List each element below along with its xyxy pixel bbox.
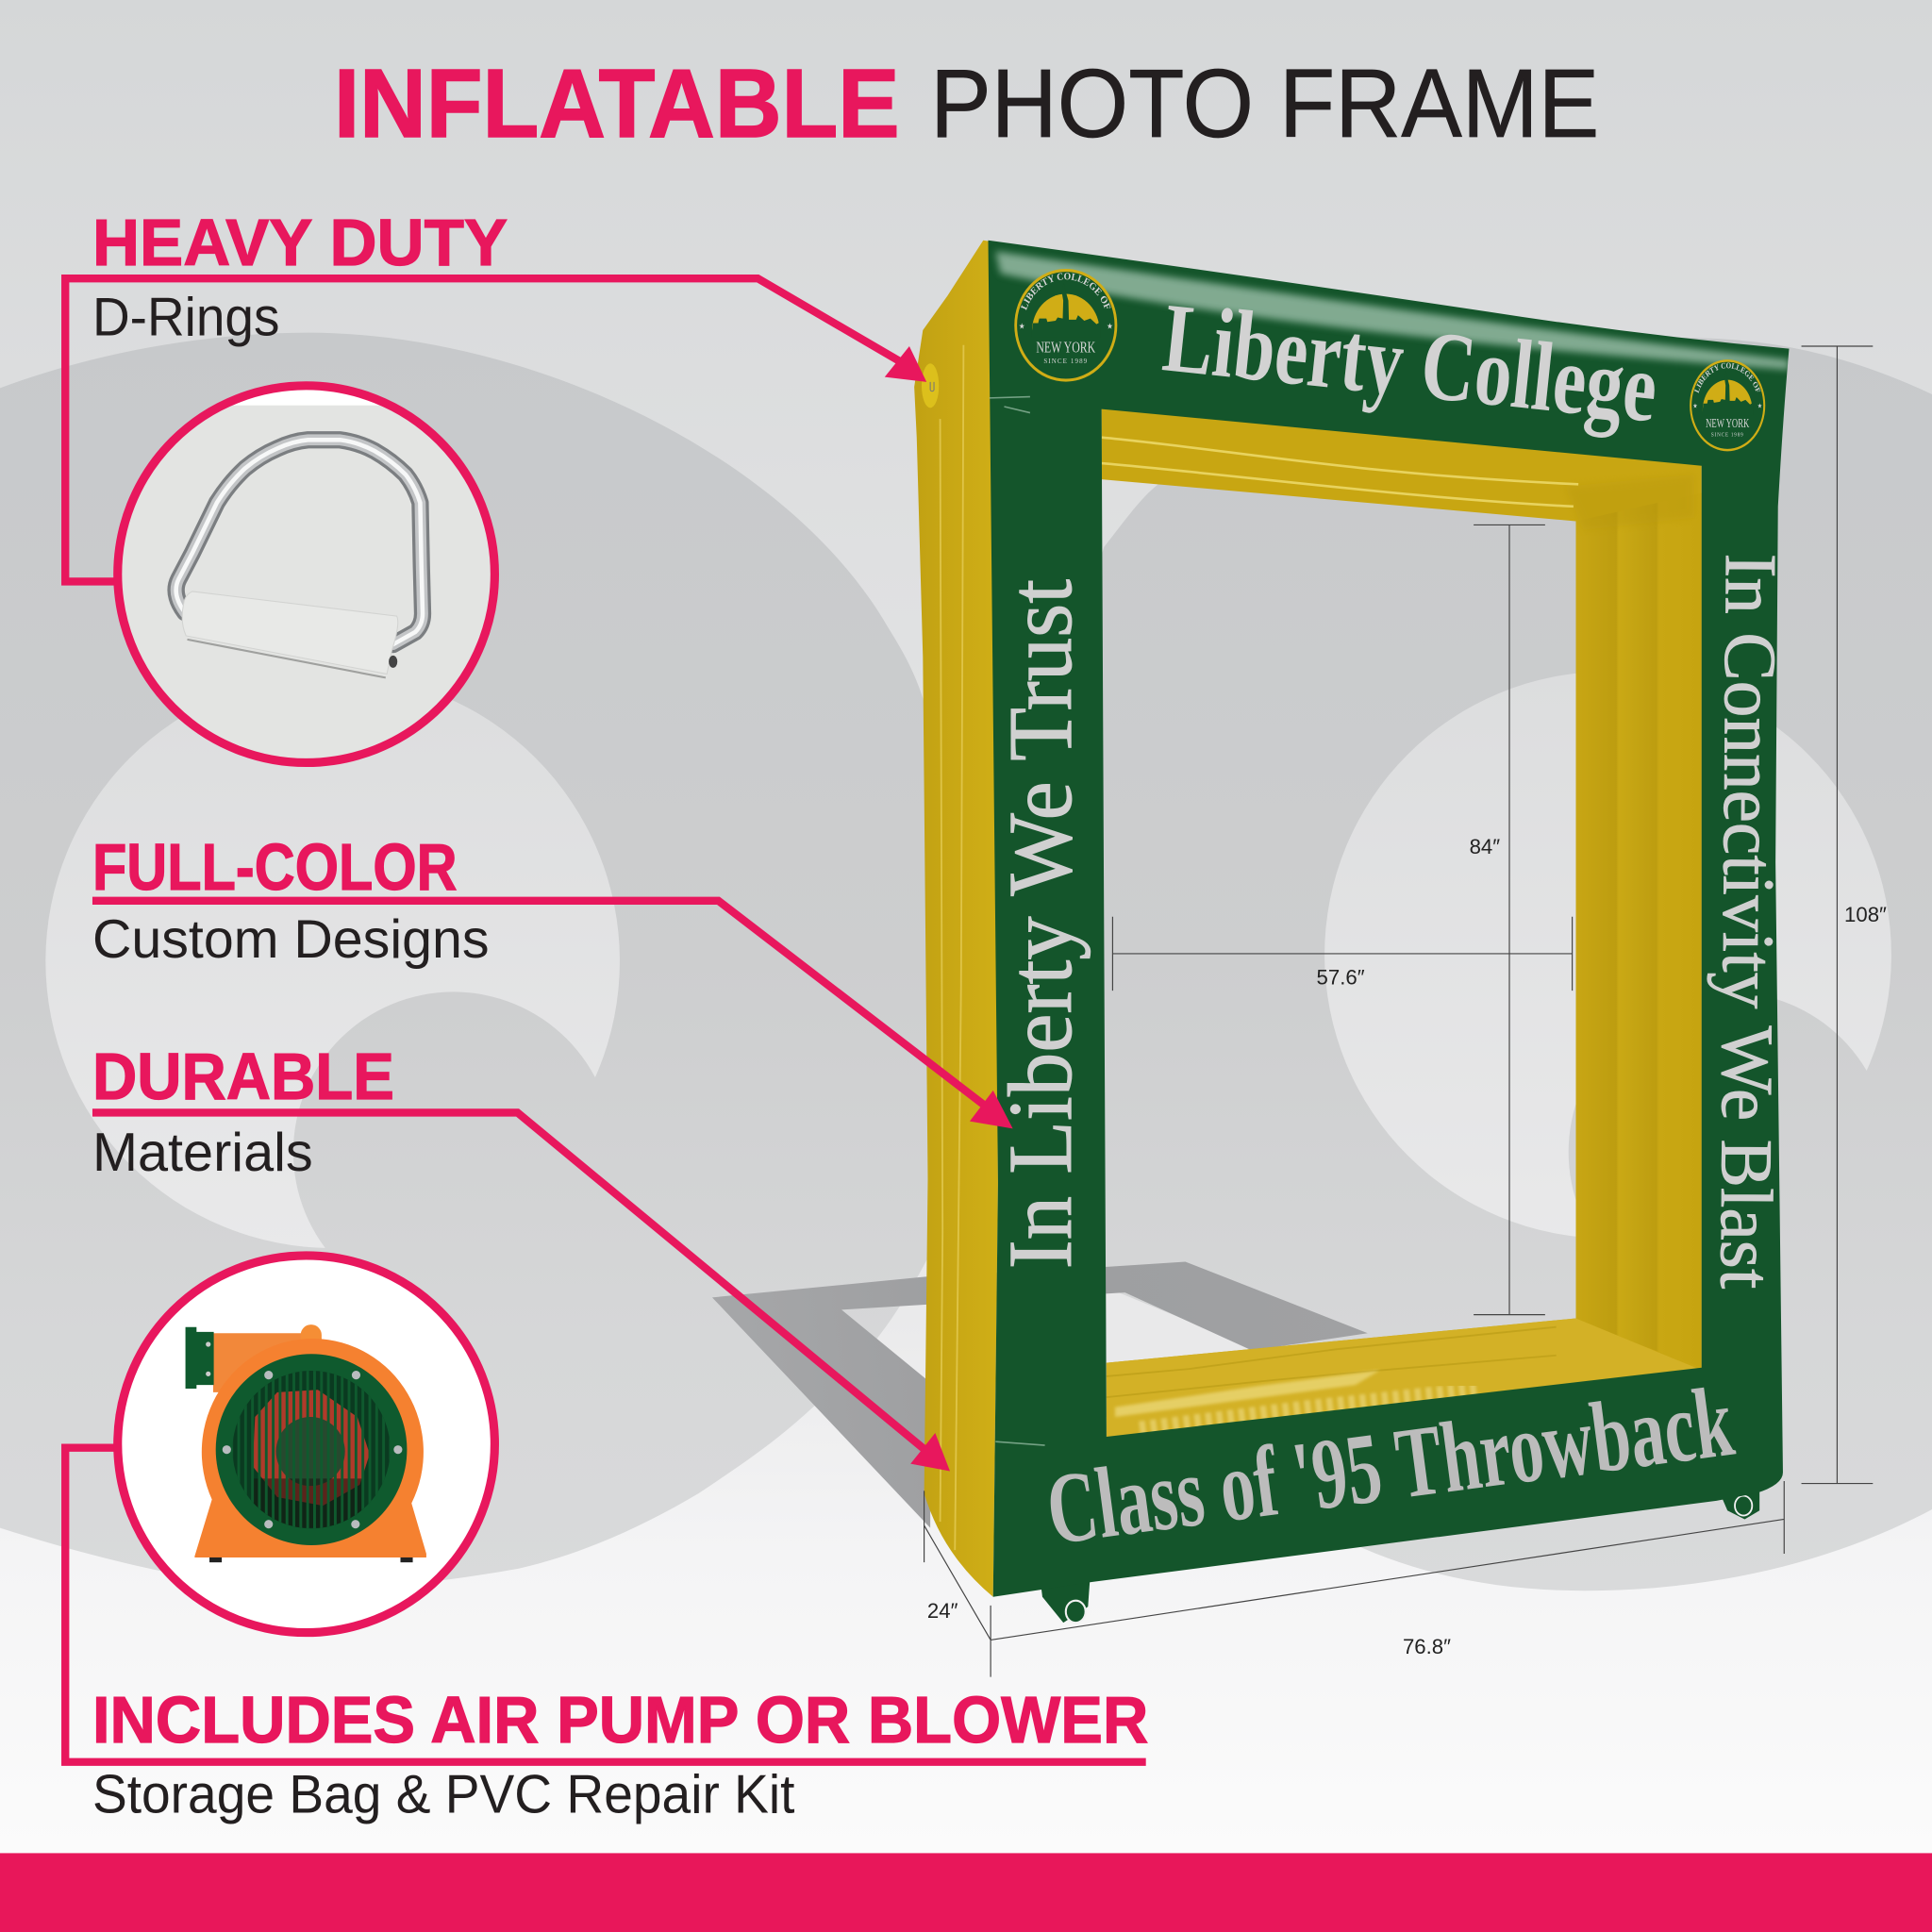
logo left: ★ [1019,322,1025,330]
text block: air pump: Storage Bag & PVC Repair Kit [92,1764,794,1824]
logo right: LIBERTY COLLEGE OF [1694,362,1760,393]
dimension labels: 108″ [1844,903,1887,926]
d-ring inset [111,382,506,762]
dimension labels: 76.8″ [1403,1635,1451,1658]
footer bar [0,1853,1932,1932]
green front face [989,241,1789,1597]
logo left [1014,269,1117,382]
frame heading: top: Liberty College [1158,282,1662,443]
callout: air pump leader [65,1448,1146,1762]
dimension labels: 24″ [927,1599,958,1623]
logo right: SINCE 1989 [1711,432,1743,439]
blower inset [118,1256,494,1633]
logo left: LIBERTY COLLEGE OF [1021,273,1111,311]
title: PHOTO FRAME [930,49,1599,158]
title [334,49,1599,158]
logo right: NEW YORK [1706,416,1749,430]
dimension labels: 57.6″ [1317,966,1365,990]
title: INFLATABLE [334,49,899,158]
dimension lines [924,346,1873,1677]
icon: d-ring metal [176,440,423,644]
side panel yellow [914,241,998,1597]
text block: air pump: INCLUDES AIR PUMP OR BLOWER [92,1683,1148,1757]
logo right: ★ [1757,403,1762,410]
feet loops [1040,1478,1759,1623]
text block: durable [92,1040,394,1183]
text block: full-color: Custom Designs [92,909,490,970]
callout: heavy duty leader [65,278,926,581]
text block: heavy duty: HEAVY DUTY [92,206,508,279]
text block: durable: Materials [92,1123,313,1183]
gloss marks [990,397,1045,1445]
icon: blower body [186,1324,426,1562]
text block: air pump [92,1683,1148,1824]
text block: durable: DURABLE [92,1040,394,1113]
floor shadow [712,1261,1368,1528]
text block: full-color: FULL-COLOR [92,830,458,904]
callout: durable leader [92,1112,950,1472]
logo left: NEW YORK [1036,340,1096,357]
text block: heavy duty [92,206,508,347]
frame text: right: In Connectivity We Blast [1705,553,1792,1290]
logo right [1690,359,1766,451]
frame text: left: In Liberty We Trust [990,579,1091,1269]
logo left: SINCE 1989 [1043,357,1088,365]
text block: full-color [92,830,490,970]
inflatable photo frame [877,240,1792,1623]
callout: full-color leader [92,901,1013,1128]
text block: heavy duty: D-Rings [92,287,279,347]
logo left: ★ [1107,322,1113,330]
logo right: ★ [1692,403,1697,410]
icon: d-ring sleeve [182,591,398,677]
inner yellow sleeve [1102,407,1702,1440]
dimension labels [927,835,1887,1658]
top gloss [995,251,1789,370]
dimension labels: 84″ [1470,835,1500,858]
